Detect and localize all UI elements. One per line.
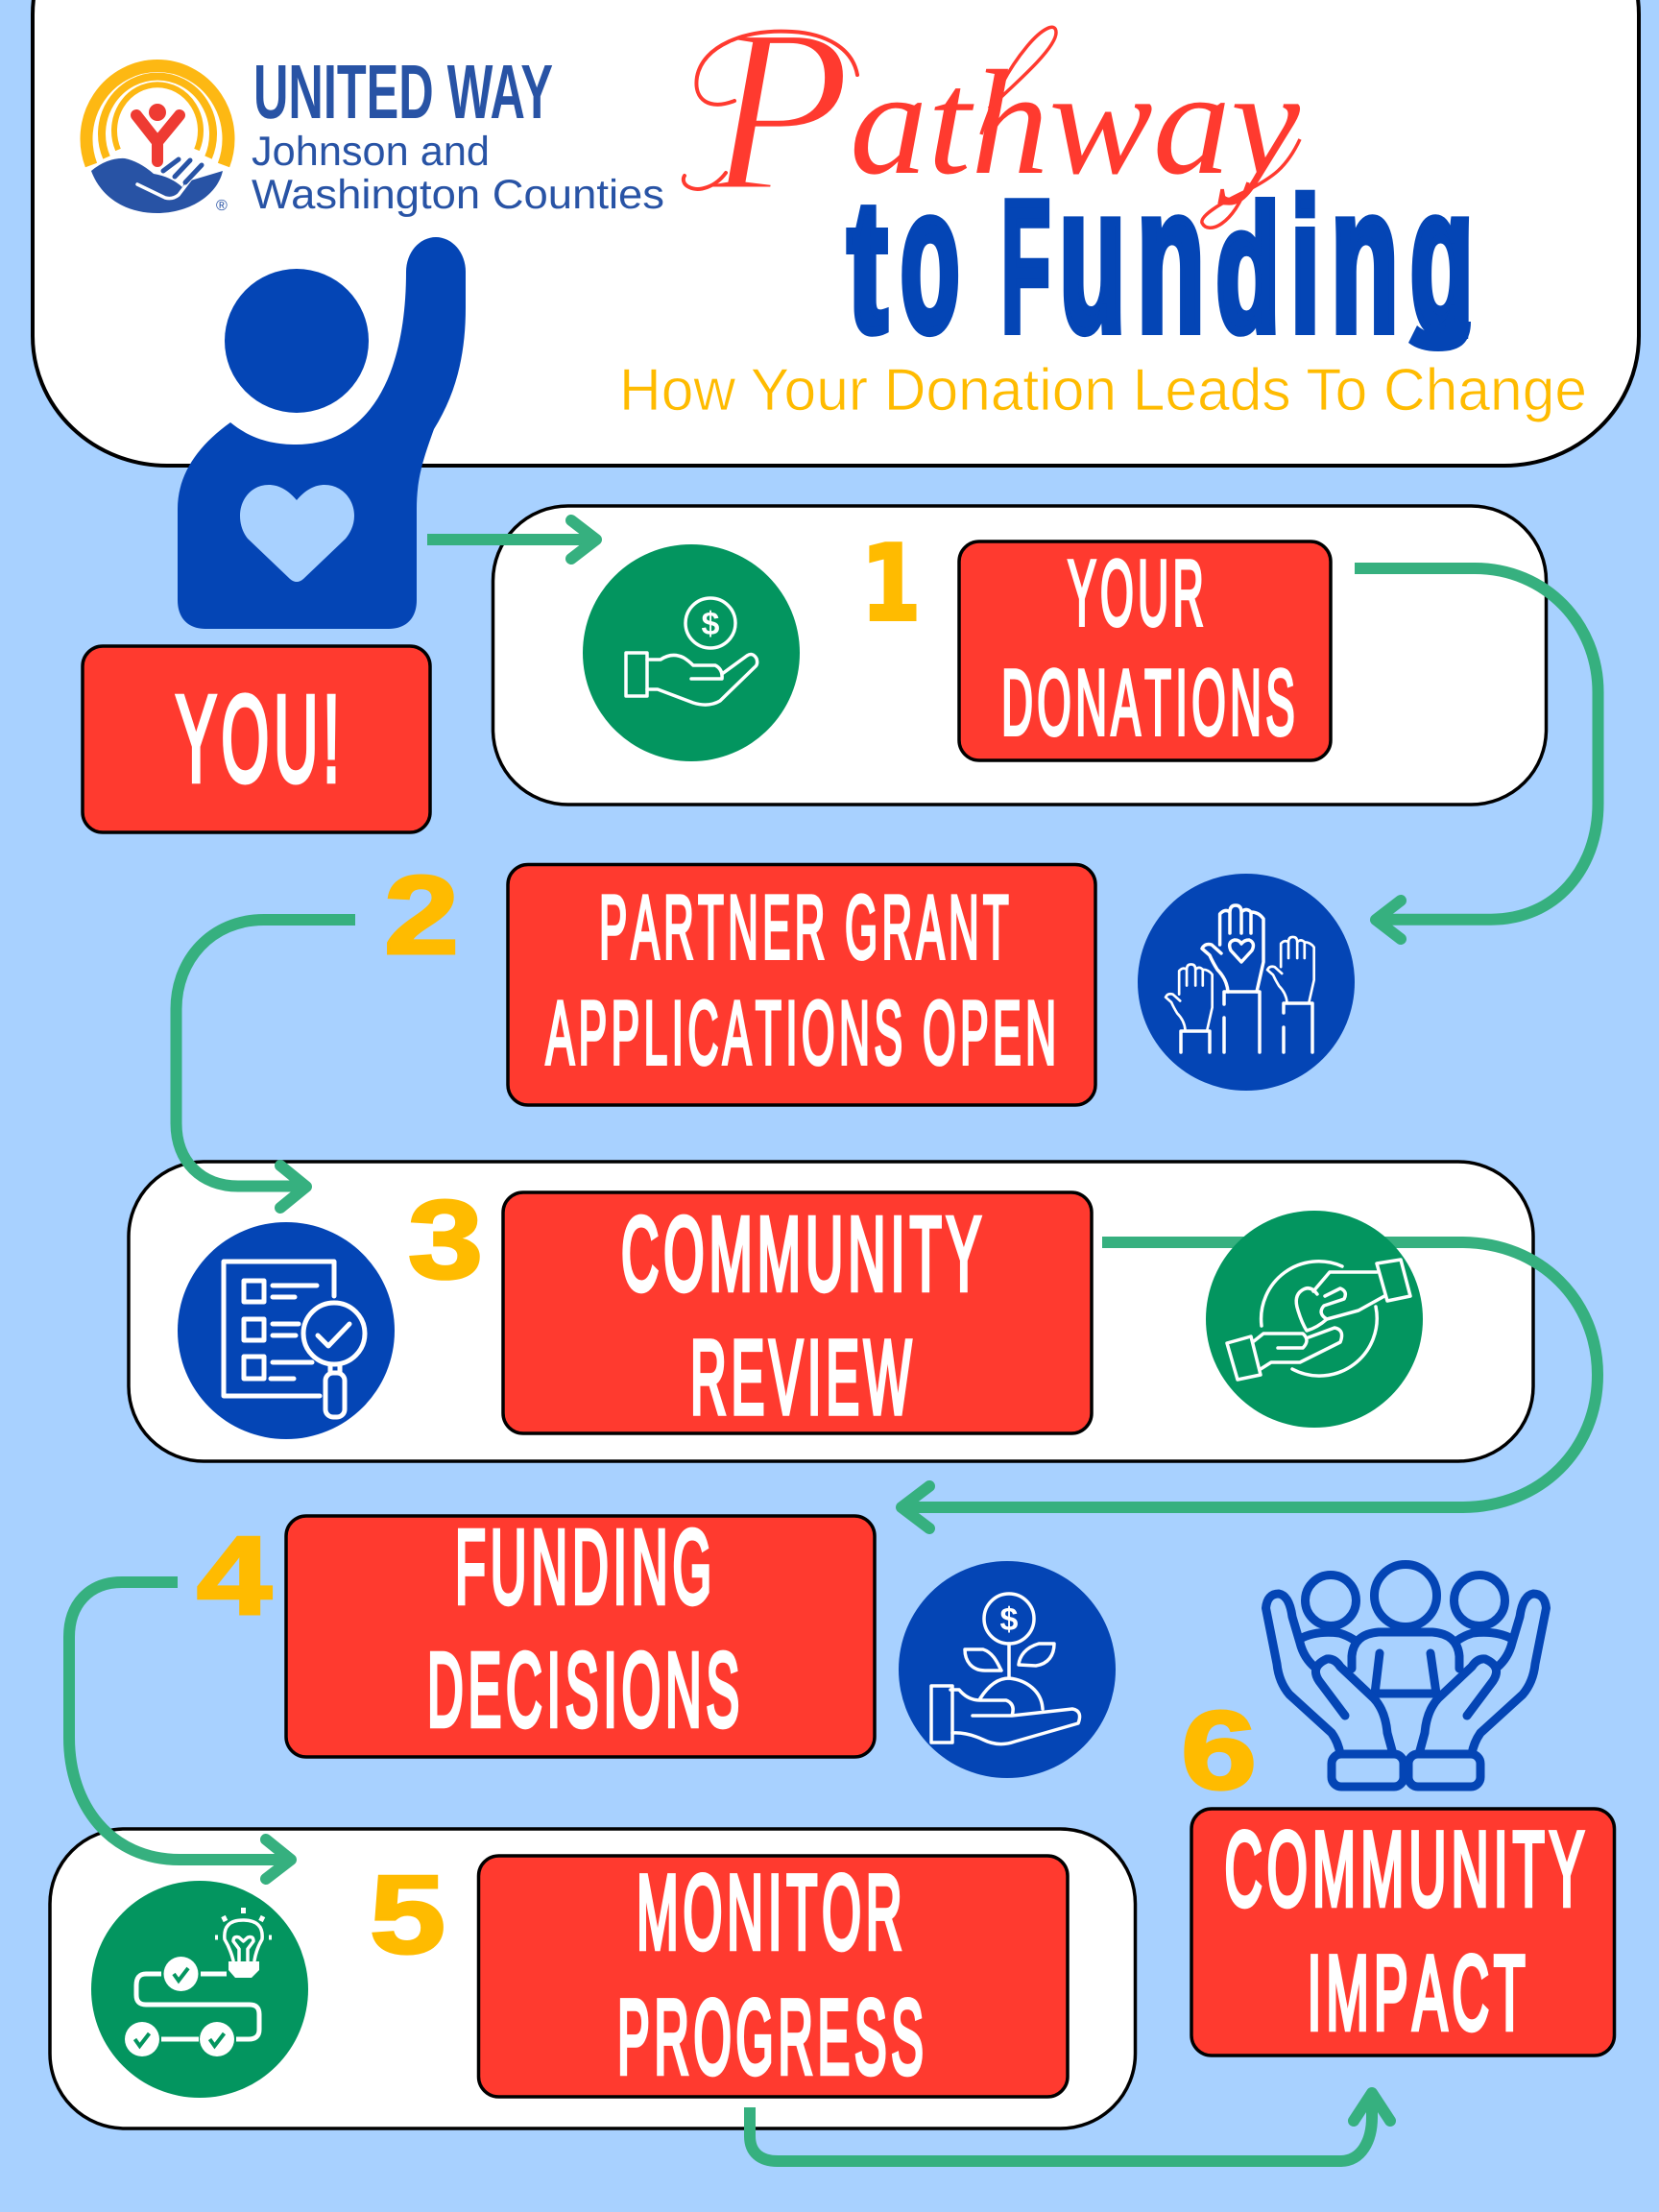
title: to Funding: n bbox=[1331, 143, 1399, 374]
box: partner grant applications open bbox=[508, 864, 1095, 1105]
logo wordmark: UNITED WAY bbox=[253, 49, 553, 134]
box: partner grant applications open: PARTNER GRANT bbox=[599, 877, 1013, 977]
panel: header bbox=[33, 0, 1639, 466]
icon: progress path with light bulb bbox=[91, 1881, 308, 2098]
box: your donations: DONATIONS bbox=[1001, 650, 1299, 755]
number 6: 6 bbox=[1181, 1688, 1257, 1813]
title: to Funding: n bbox=[1137, 143, 1205, 374]
icon: community held in hands bbox=[1265, 1565, 1546, 1787]
box: community review bbox=[503, 1192, 1092, 1436]
number 1: 1 bbox=[861, 524, 921, 644]
icon: donation hand with coin bbox=[583, 544, 800, 761]
box: monitor progress: PROGRESS bbox=[617, 1978, 927, 2097]
title: to Funding bbox=[846, 190, 1471, 351]
panel: step 5 bbox=[50, 1829, 1135, 2128]
box: your donations: YOUR bbox=[1068, 541, 1208, 645]
icon: person with raised arm and heart bbox=[178, 237, 466, 629]
number 3: 3 bbox=[408, 1177, 483, 1302]
title: to Funding: d bbox=[1216, 171, 1280, 369]
number 4: 4 bbox=[197, 1513, 272, 1638]
icon: hands exchanging heart bbox=[1206, 1211, 1423, 1428]
title: Pathway bbox=[684, 0, 1301, 240]
icon: checklist with magnifier bbox=[178, 1222, 395, 1439]
box: monitor progress bbox=[478, 1853, 1068, 2097]
icon: rainbow arcs bbox=[86, 66, 228, 165]
logo wordmark bbox=[252, 49, 664, 218]
number 5: 5 bbox=[370, 1852, 445, 1977]
panel: step 1 bbox=[493, 506, 1546, 805]
title: to Funding: F bbox=[1001, 162, 1050, 370]
title: to Funding: i bbox=[1290, 161, 1319, 371]
icon: money plant on hand: $ bbox=[1000, 1601, 1019, 1638]
logo wordmark: Johnson and bbox=[252, 129, 490, 175]
icon: money plant on hand bbox=[899, 1561, 1116, 1778]
icon: person figure bbox=[136, 104, 180, 161]
title: to Funding: g bbox=[1410, 143, 1474, 374]
box: monitor progress: MONITOR bbox=[637, 1853, 906, 1972]
box: funding decisions: DECISIONS bbox=[427, 1632, 744, 1749]
icon: donation hand with coin: $ bbox=[702, 606, 720, 642]
box: YOU: YOU! bbox=[176, 670, 345, 808]
box: partner grant applications open: APPLICATIONS OPEN bbox=[545, 982, 1060, 1083]
arrow: step 2 to step 3 bbox=[177, 920, 355, 1208]
arrow: step 3 to step 4 bbox=[902, 1242, 1598, 1528]
title: to Funding: u bbox=[1059, 143, 1125, 374]
icon: raised hands with heart bbox=[1138, 874, 1355, 1091]
subtitle: How Your Donation Leads To Change bbox=[619, 357, 1587, 423]
title: to Funding: t bbox=[848, 162, 887, 370]
box: community review: COMMUNITY bbox=[621, 1196, 986, 1313]
arrow: step 1 to step 2 bbox=[1355, 568, 1598, 939]
box: YOU bbox=[83, 646, 430, 832]
box: funding decisions: FUNDING bbox=[455, 1509, 716, 1626]
title: to Funding: o bbox=[901, 143, 960, 374]
registered mark: ® bbox=[216, 198, 228, 214]
box: community review: REVIEW bbox=[690, 1319, 916, 1436]
title: Pathway: athway bbox=[850, 39, 1301, 205]
panel: step 3 bbox=[129, 1162, 1533, 1461]
box: your donations bbox=[959, 541, 1331, 760]
number 2: 2 bbox=[384, 853, 459, 977]
box: community impact bbox=[1191, 1809, 1615, 2056]
arrow: step 4 to step 5 bbox=[69, 1582, 291, 1879]
arrow: step 5 to step 6 bbox=[750, 2093, 1390, 2161]
box: funding decisions bbox=[286, 1509, 875, 1757]
arrow: you to step 1 bbox=[427, 520, 596, 559]
logo: United Way bbox=[86, 49, 664, 218]
icon: open hand bbox=[91, 158, 223, 213]
logo wordmark: Washington Counties bbox=[252, 172, 664, 218]
